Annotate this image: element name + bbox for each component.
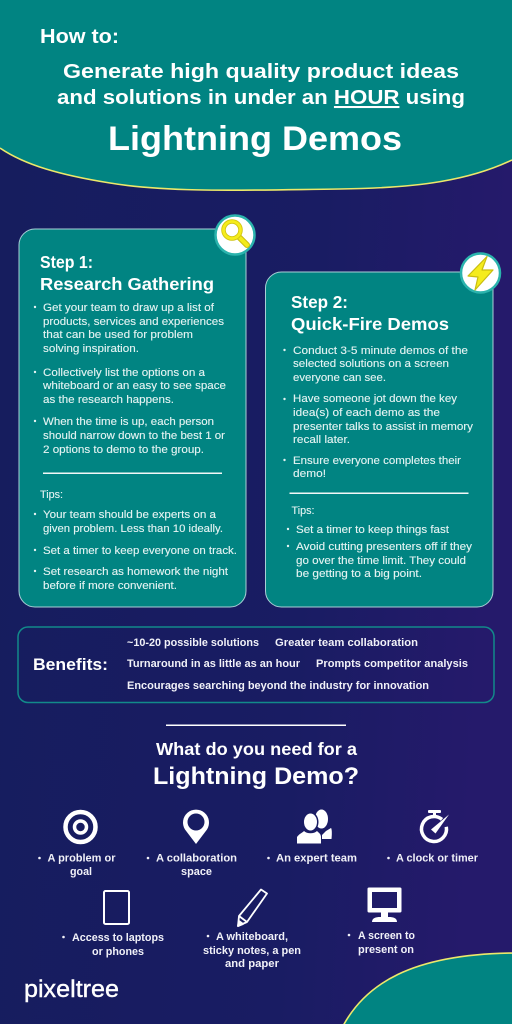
item: clock or timer [387, 810, 478, 864]
icon: lightning bolt [461, 254, 500, 292]
panel: benefits [18, 627, 494, 702]
step 1 bullet list: whiteboard or an easy to see space [42, 380, 226, 392]
step 2 tips: be getting to a big point. [296, 568, 422, 580]
icon: tablet [104, 891, 129, 924]
step 1 heading: Research Gathering [40, 274, 214, 294]
benefits list: Greater team collaboration [275, 637, 418, 649]
benefits label: Benefits: [33, 655, 108, 674]
item: laptops or phones: Access to laptops [72, 932, 164, 944]
benefits list [127, 637, 468, 692]
item: whiteboard and stationery: A whiteboard, [216, 931, 288, 943]
logo: pixeltree: pixeltree [24, 976, 119, 1003]
step 1 tips: before if more convenient. [43, 580, 177, 592]
step 1 bullet list: Collectively list the options on a [43, 367, 205, 379]
item: screen: present on [358, 944, 414, 956]
icon: magnifying glass [216, 216, 254, 254]
item: whiteboard and stationery: sticky notes, a pen [203, 945, 301, 957]
item: expert team: An expert team [276, 852, 357, 864]
item: laptops or phones [62, 891, 164, 958]
icon: pencil [238, 890, 267, 926]
section heading: what do you need: What do you need for a [156, 739, 357, 759]
item: problem or goal: goal [70, 866, 92, 878]
icon: monitor [368, 888, 402, 922]
step 2 bullet list: everyone can see. [293, 372, 386, 384]
step 2 tips: Tips: [292, 505, 314, 517]
step 1 tips [34, 489, 237, 592]
step 1 bullet list: as the research happens. [43, 394, 174, 406]
step 2 bullet list: selected solutions on a screen [293, 358, 449, 370]
title subtitle [57, 60, 465, 109]
item: whiteboard and stationery [203, 890, 301, 970]
title subtitle: and solutions in under an HOUR using [57, 86, 465, 109]
item: expert team [267, 810, 357, 864]
step 1 tips: Set research as homework the night [43, 566, 228, 578]
benefits list: Turnaround in as little as an hour [127, 658, 300, 670]
main title: Lightning Demos [108, 120, 402, 158]
icon: people [297, 810, 332, 844]
step 2 bullet list: idea(s) of each demo as the [293, 407, 440, 419]
step 1 heading: Step 1: [40, 252, 93, 272]
step 1 bullet list: that can be used for problem [43, 329, 193, 341]
step 2 tips: Avoid cutting presenters off if they [296, 541, 473, 553]
benefits list: ~10-20 possible solutions [127, 637, 259, 649]
icon: map pin [183, 810, 209, 844]
step 2 bullet list: recall later. [293, 434, 350, 446]
section heading: what do you need: Lightning Demo? [153, 763, 359, 790]
step 1 tips: Set a timer to keep everyone on track. [43, 545, 237, 557]
step 2 bullet list: Ensure everyone completes their [293, 455, 462, 467]
step 1 tips: Tips: [40, 489, 63, 501]
header banner [0, 0, 512, 190]
step 1 tips: given problem. Less than 10 ideally. [43, 523, 223, 535]
item: screen [348, 888, 416, 956]
item: problem or goal: A problem or [48, 852, 116, 864]
step 2 bullet list: Have someone jot down the key [293, 393, 458, 405]
item: laptops or phones: or phones [92, 946, 144, 958]
item: collaboration space: space [181, 866, 212, 878]
icon: target [66, 812, 96, 842]
step 1 bullet list: Get your team to draw up a list of [43, 302, 214, 314]
item: screen: A screen to [358, 930, 416, 942]
step 2 bullet list: presenter talks to assist in memory [293, 421, 474, 433]
icon: stopwatch [421, 810, 449, 842]
section heading: what do you need [153, 739, 359, 790]
bottom right corner shape [343, 953, 512, 1024]
step 1 bullet list: products, services and experiences [43, 316, 224, 328]
item: collaboration space [147, 810, 237, 878]
step 2 bullet list: demo! [293, 468, 326, 480]
step 2 heading: Quick-Fire Demos [291, 314, 449, 334]
step 1 tips: Your team should be experts on a [43, 509, 216, 521]
item: problem or goal [38, 812, 116, 878]
step 2 tips [287, 505, 473, 580]
step 1 heading [40, 252, 214, 294]
step 2 bullet list [283, 345, 474, 480]
step 2 tips: go over the time limit. They could [296, 555, 466, 567]
step 2 tips: Set a timer to keep things fast [296, 524, 449, 536]
step 2 heading: Step 2: [291, 292, 348, 312]
how to label: How to: [40, 26, 119, 48]
benefits list: Encourages searching beyond the industry for innovation [127, 680, 429, 692]
step 1 bullet list: 2 options to demo to the group. [43, 444, 204, 456]
step 1 bullet list: solving inspiration. [43, 343, 139, 355]
panel: step 2 quick-fire demos [266, 254, 500, 607]
step 1 bullet list: should narrow down to the best 1 or [43, 430, 225, 442]
item: collaboration space: A collaboration [156, 852, 237, 864]
title subtitle: Generate high quality product ideas [63, 60, 459, 83]
panel: step 1 research gathering [19, 216, 254, 607]
benefits list: Prompts competitor analysis [316, 658, 468, 670]
step 1 bullet list [34, 302, 226, 456]
step 2 heading [291, 292, 449, 334]
item: whiteboard and stationery: and paper [225, 958, 279, 970]
item: clock or timer: A clock or timer [396, 852, 478, 864]
step 2 bullet list: Conduct 3-5 minute demos of the [293, 345, 468, 357]
step 1 bullet list: When the time is up, each person [43, 416, 214, 428]
